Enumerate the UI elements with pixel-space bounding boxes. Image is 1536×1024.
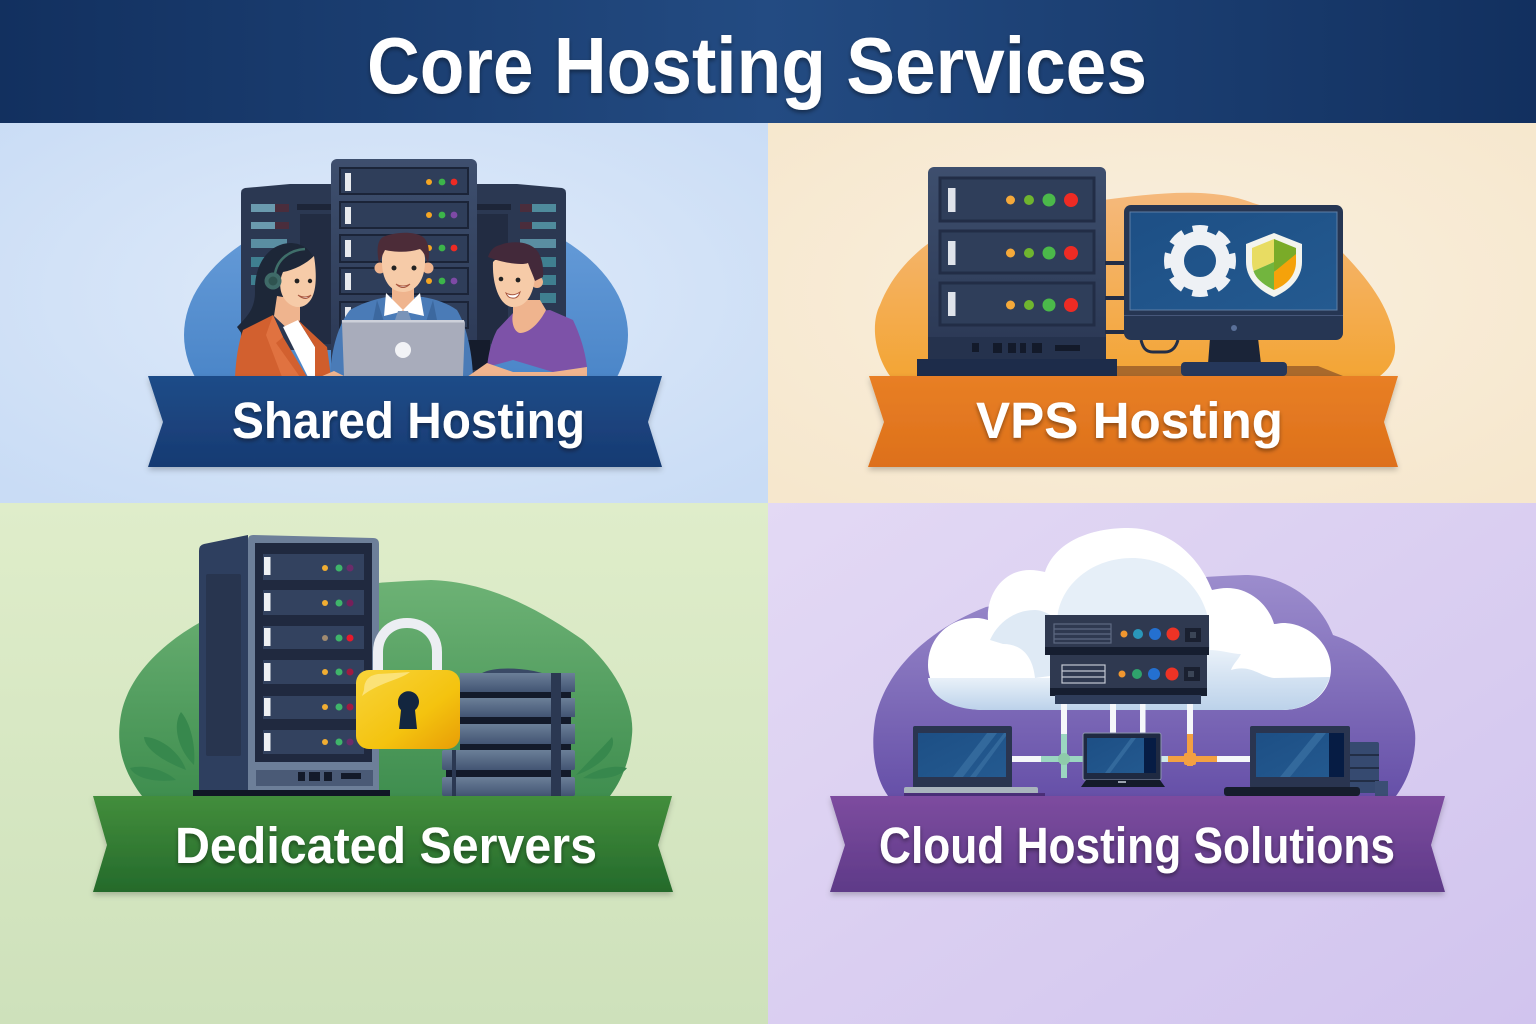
- panel: dedicated servers: [0, 503, 768, 1024]
- illustration: server and monitor: [875, 167, 1395, 377]
- drive stack: [1348, 742, 1388, 796]
- drive stack: [442, 669, 575, 796]
- illustration: cloud network: [873, 528, 1415, 796]
- server tower: [917, 167, 1117, 377]
- banner label: Dedicated Servers: [175, 817, 597, 874]
- monitor: [1124, 205, 1343, 376]
- person: woman with headset: [235, 243, 331, 377]
- banner label: Cloud Hosting Solutions: [879, 817, 1395, 874]
- banner: cloud hosting solutions: [830, 796, 1445, 892]
- icon: shield: [1246, 233, 1302, 297]
- person: man in purple shirt: [467, 242, 587, 378]
- wires: [1012, 704, 1251, 778]
- laptop left: [904, 726, 1045, 796]
- server tower: [193, 535, 390, 797]
- center server rack: [331, 159, 490, 376]
- banner: shared hosting: [148, 376, 662, 467]
- connector cables: [1105, 261, 1178, 352]
- cloud: [928, 528, 1331, 710]
- server unit top: [1045, 615, 1209, 655]
- person: man at laptop: [330, 233, 473, 377]
- title: Core Hosting Services: [367, 21, 1147, 110]
- illustration: tower, padlock and drives: [119, 535, 632, 797]
- banner label: VPS Hosting: [976, 392, 1283, 449]
- icon: laptop: [342, 320, 465, 376]
- server unit bottom: [1050, 655, 1207, 704]
- side server rack left: [241, 184, 331, 350]
- laptop middle: [1081, 733, 1165, 787]
- banner: vps hosting: [868, 376, 1398, 467]
- panel: cloud hosting solutions: [768, 503, 1536, 1024]
- icon: gear: [1168, 229, 1232, 293]
- panel: shared hosting: [0, 123, 768, 503]
- banner label: Shared Hosting: [232, 392, 585, 449]
- header bar: [0, 0, 1536, 123]
- laptop right: [1224, 726, 1360, 796]
- panel: vps hosting: [768, 123, 1536, 503]
- icon: padlock: [356, 623, 460, 749]
- leaves: [130, 712, 627, 781]
- illustration: servers and team: [184, 159, 628, 376]
- side server rack right: [476, 184, 566, 350]
- banner: dedicated servers: [93, 796, 673, 892]
